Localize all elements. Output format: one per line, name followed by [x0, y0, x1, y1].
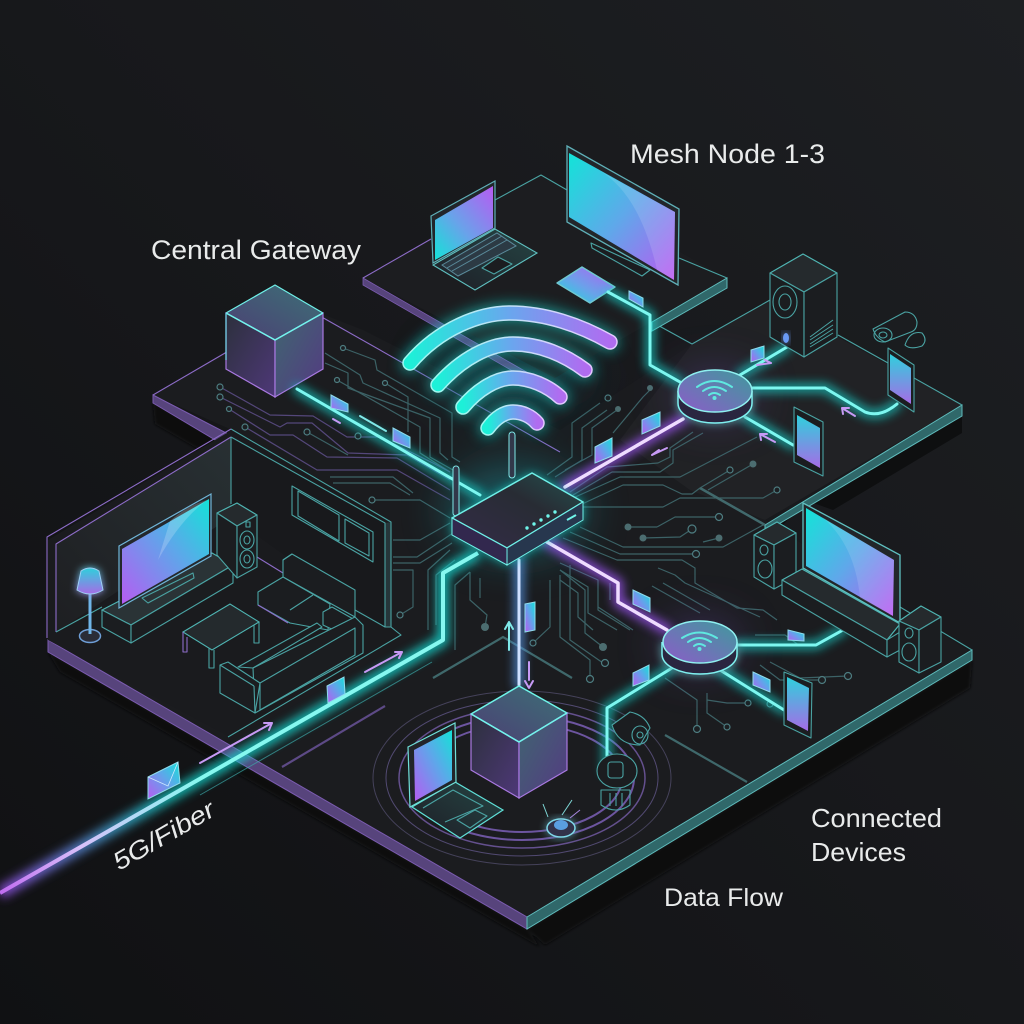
icon: speaker right — [899, 606, 941, 673]
right plate inner outline — [652, 300, 770, 344]
beams: hub 2 links — [607, 630, 843, 770]
icon: camera small — [612, 712, 650, 745]
panel: top mesh plate — [363, 146, 727, 381]
icon: speaker — [217, 503, 257, 578]
platform edge: right plate — [765, 405, 962, 532]
window — [292, 486, 373, 562]
label: Mesh Node 1-3: Mesh Node 1-3 — [630, 139, 825, 169]
icon: phone lower — [784, 672, 812, 738]
data flow arrows — [200, 360, 855, 763]
beams: hub 1 links — [608, 292, 897, 445]
glow haze — [430, 335, 755, 669]
circuit traces — [217, 346, 852, 782]
icon: tv — [119, 494, 211, 608]
icon: wifi symbol — [410, 313, 610, 428]
label: Data Flow: Data Flow — [664, 884, 784, 912]
icon: bottom laptop — [408, 723, 503, 838]
platform edge: gateway plate — [153, 395, 232, 444]
icon: phone right — [888, 348, 914, 412]
icon: router — [452, 432, 583, 565]
beam: router to hub 2 — [547, 542, 667, 630]
floor outline right — [900, 607, 972, 650]
beam: gateway to router — [297, 389, 480, 495]
floor accent lines — [433, 637, 572, 678]
right plate drop shadow — [765, 417, 962, 540]
icon: monitor — [567, 146, 679, 285]
icon: mesh hub 2 — [662, 621, 737, 674]
platform edge: right teal — [527, 650, 972, 929]
icon: tablet — [557, 267, 615, 303]
label: Central Gateway: Central Gateway — [151, 235, 362, 265]
icon: central cube — [471, 686, 567, 798]
icon: gateway cube — [226, 285, 323, 397]
icon: tv right — [782, 503, 900, 657]
icon: speaker left — [754, 522, 796, 589]
icon: tv console — [102, 553, 233, 643]
label: Connected Devices: Devices — [811, 837, 906, 867]
platform: main floor — [48, 300, 972, 929]
data envelopes — [148, 291, 804, 799]
icon: coffee table — [183, 604, 259, 668]
icon: small sensor — [543, 800, 580, 837]
icon: security camera — [873, 312, 925, 348]
beam: router to cube — [514, 560, 524, 685]
label: Connected Devices: Connected — [811, 803, 942, 833]
icon: robot assistant — [597, 754, 637, 810]
icon: speaker tower — [770, 254, 837, 357]
icon: floor lamp — [77, 568, 103, 642]
icon: phone mid — [794, 407, 823, 476]
platform edge: left purple — [48, 640, 527, 929]
platform shadows — [48, 402, 972, 947]
panel: room — [47, 429, 401, 737]
rings around cube — [373, 691, 671, 865]
icon: laptop — [431, 181, 537, 290]
label: 5G/Fiber: 5G/Fiber — [108, 794, 222, 876]
icon: mesh hub 1 — [678, 370, 752, 423]
beam: router to hub 1 — [565, 419, 683, 487]
beam: fiber — [0, 553, 478, 893]
icon: sofa — [220, 554, 363, 713]
gateway plate top outline — [153, 307, 304, 395]
